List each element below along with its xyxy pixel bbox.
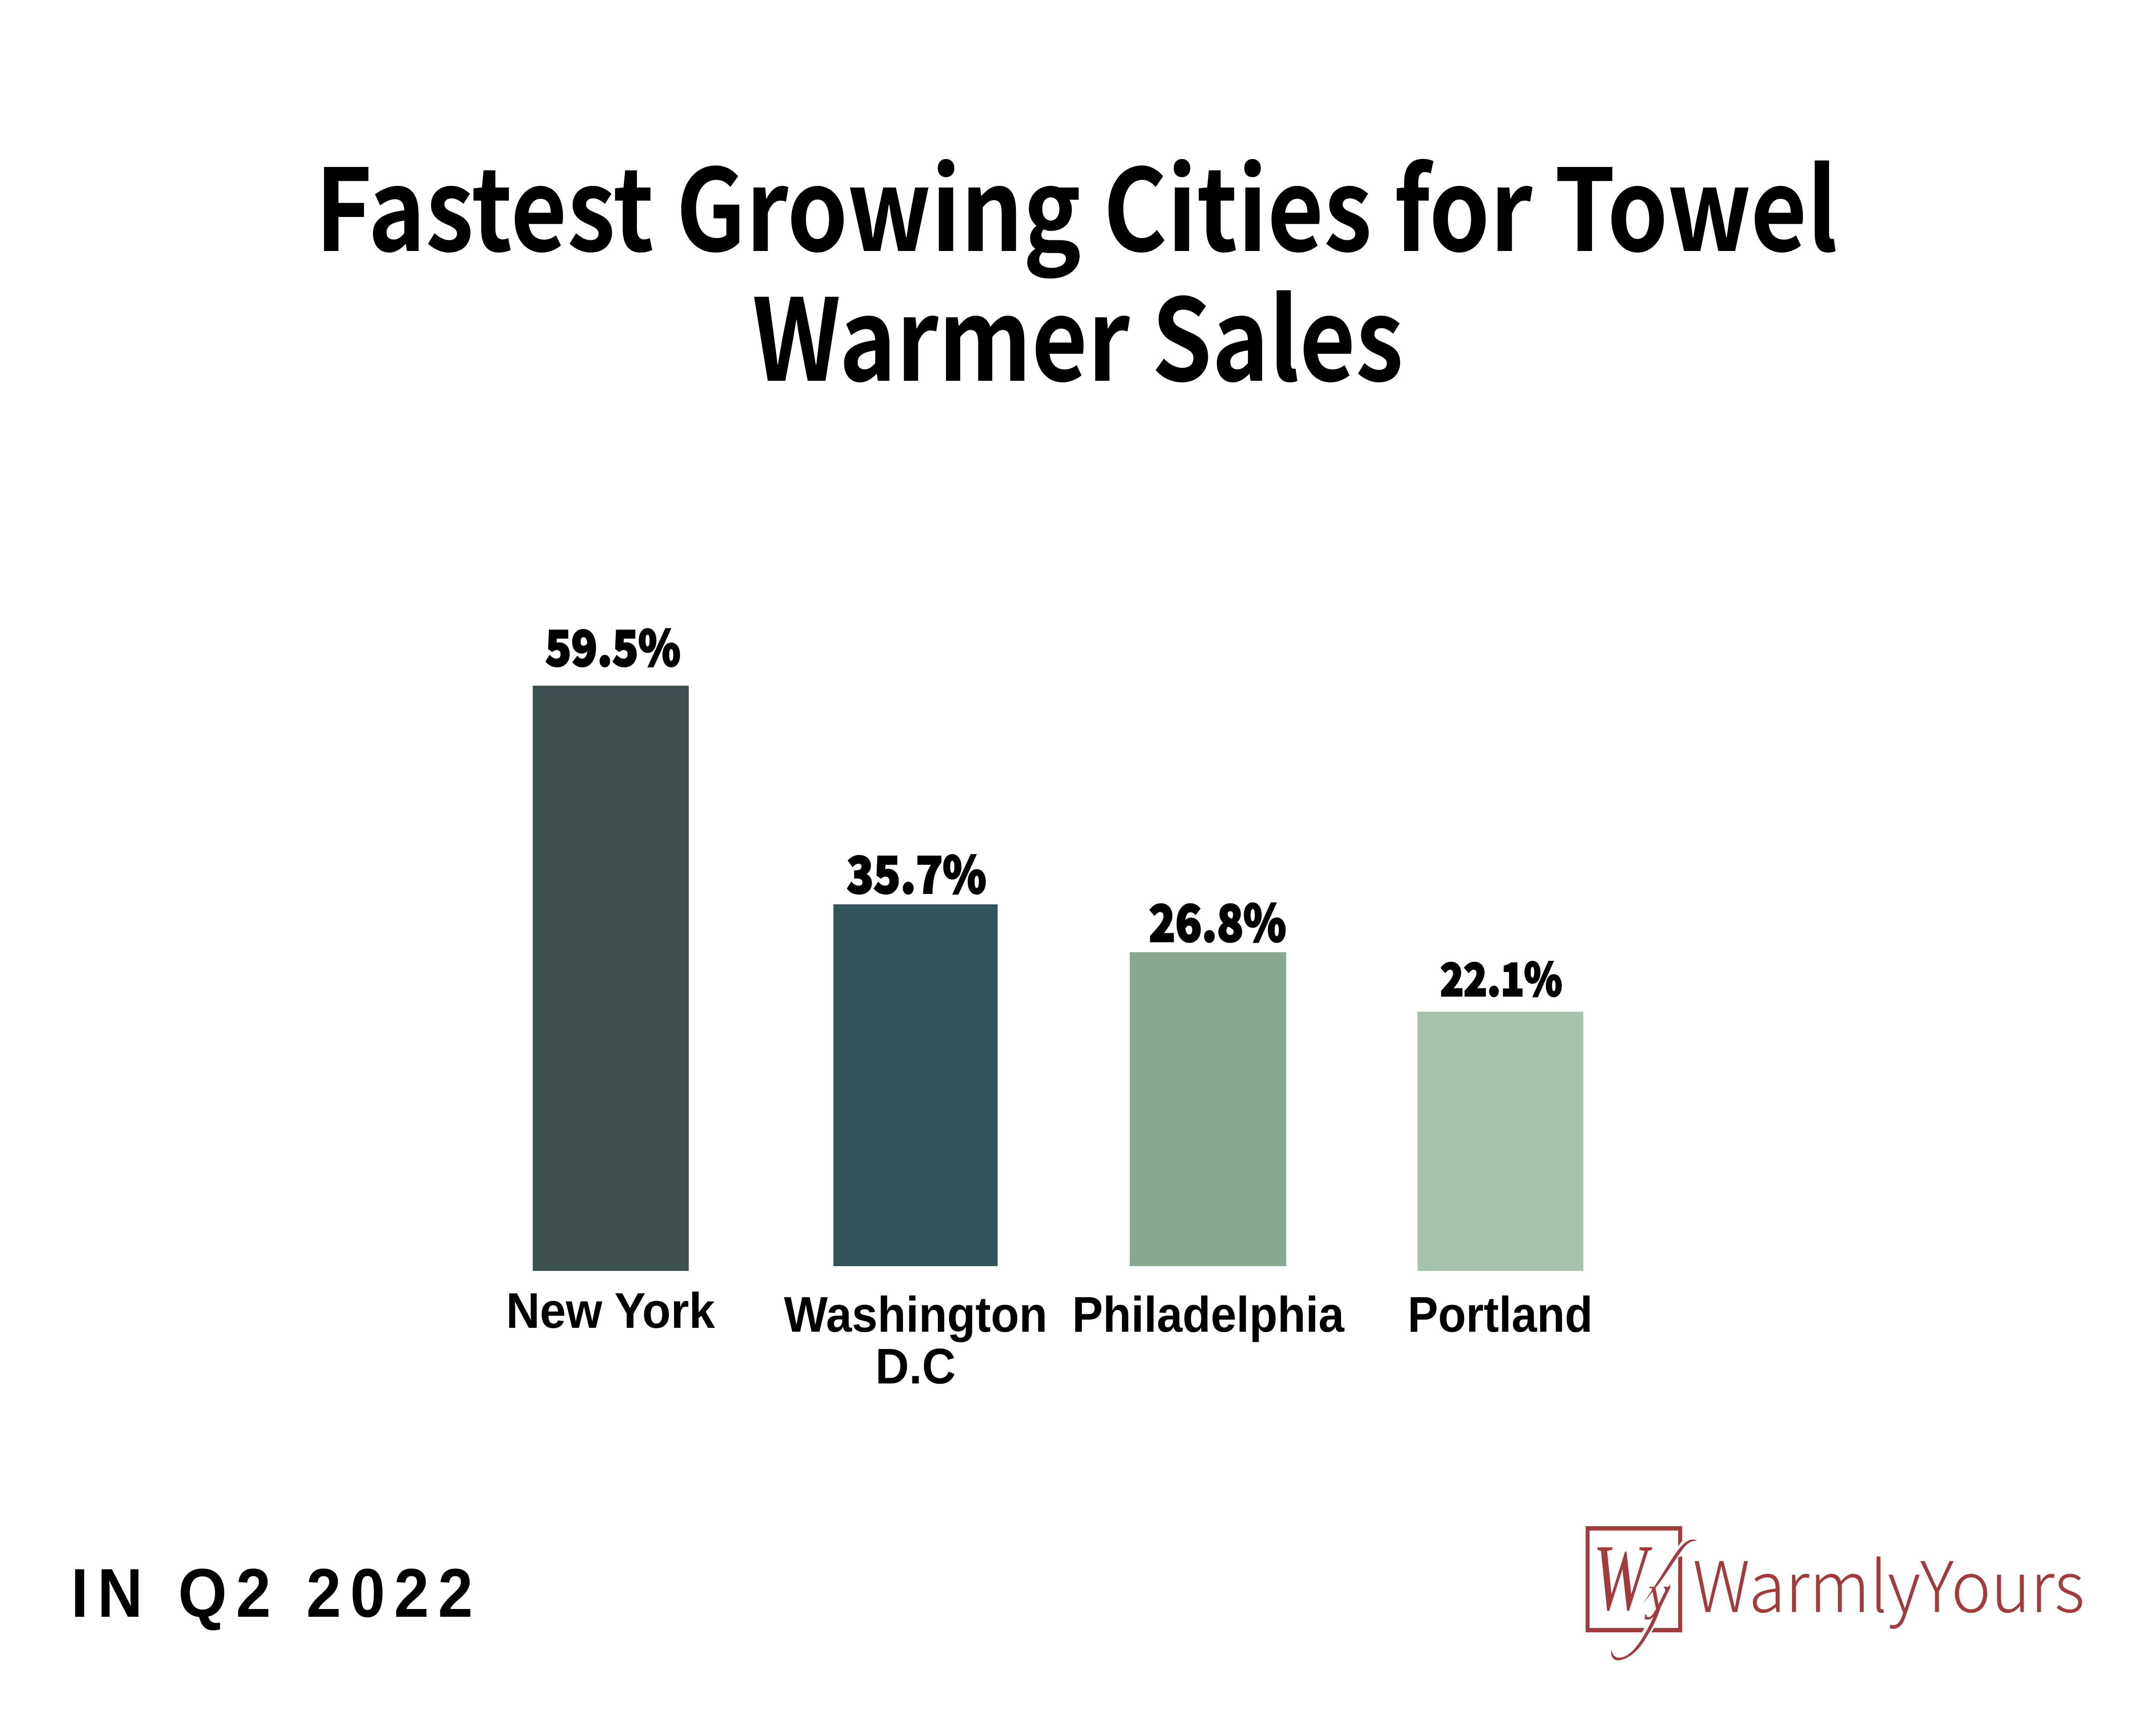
wordmark: WarmlyYours	[1692, 1531, 2085, 1632]
bar: Portland 22.1%	[1408, 944, 1593, 1342]
icon: Wy monogram: W	[1593, 1525, 1652, 1630]
bar: Washington D.C 35.7%: D.C	[875, 1339, 956, 1394]
title: Warmer Sales	[752, 249, 1404, 414]
bar: Philadelphia 26.8%: 26.8%	[1149, 883, 1286, 957]
title	[315, 119, 1838, 414]
bar: Washington D.C 35.7%	[784, 835, 1047, 1394]
bar: Washington D.C 35.7%: Washington	[784, 1287, 1047, 1342]
bar: New York 59.5%: New York	[506, 1283, 715, 1339]
icon: Wy monogram: y	[1645, 1567, 1669, 1620]
bar: Washington D.C 35.7%: 35.7%	[847, 835, 986, 908]
bar: Portland 22.1%: 22.1%	[1440, 944, 1562, 1009]
icon: Wy monogram	[1588, 1525, 1697, 1660]
title: Fastest Growing Cities for Towel	[315, 119, 1838, 284]
bar: New York 59.5%: 59.5%	[545, 610, 680, 680]
bar: Portland 22.1%: Portland	[1408, 1287, 1593, 1342]
period caption: IN Q2 2022	[71, 1555, 482, 1632]
bar: Philadelphia 26.8%	[1072, 883, 1345, 1342]
bar: Philadelphia 26.8%: Philadelphia	[1072, 1287, 1345, 1342]
logo: WarmlyYours	[1588, 1525, 2085, 1660]
bar: New York 59.5%	[506, 610, 715, 1339]
bar chart	[506, 610, 1593, 1394]
